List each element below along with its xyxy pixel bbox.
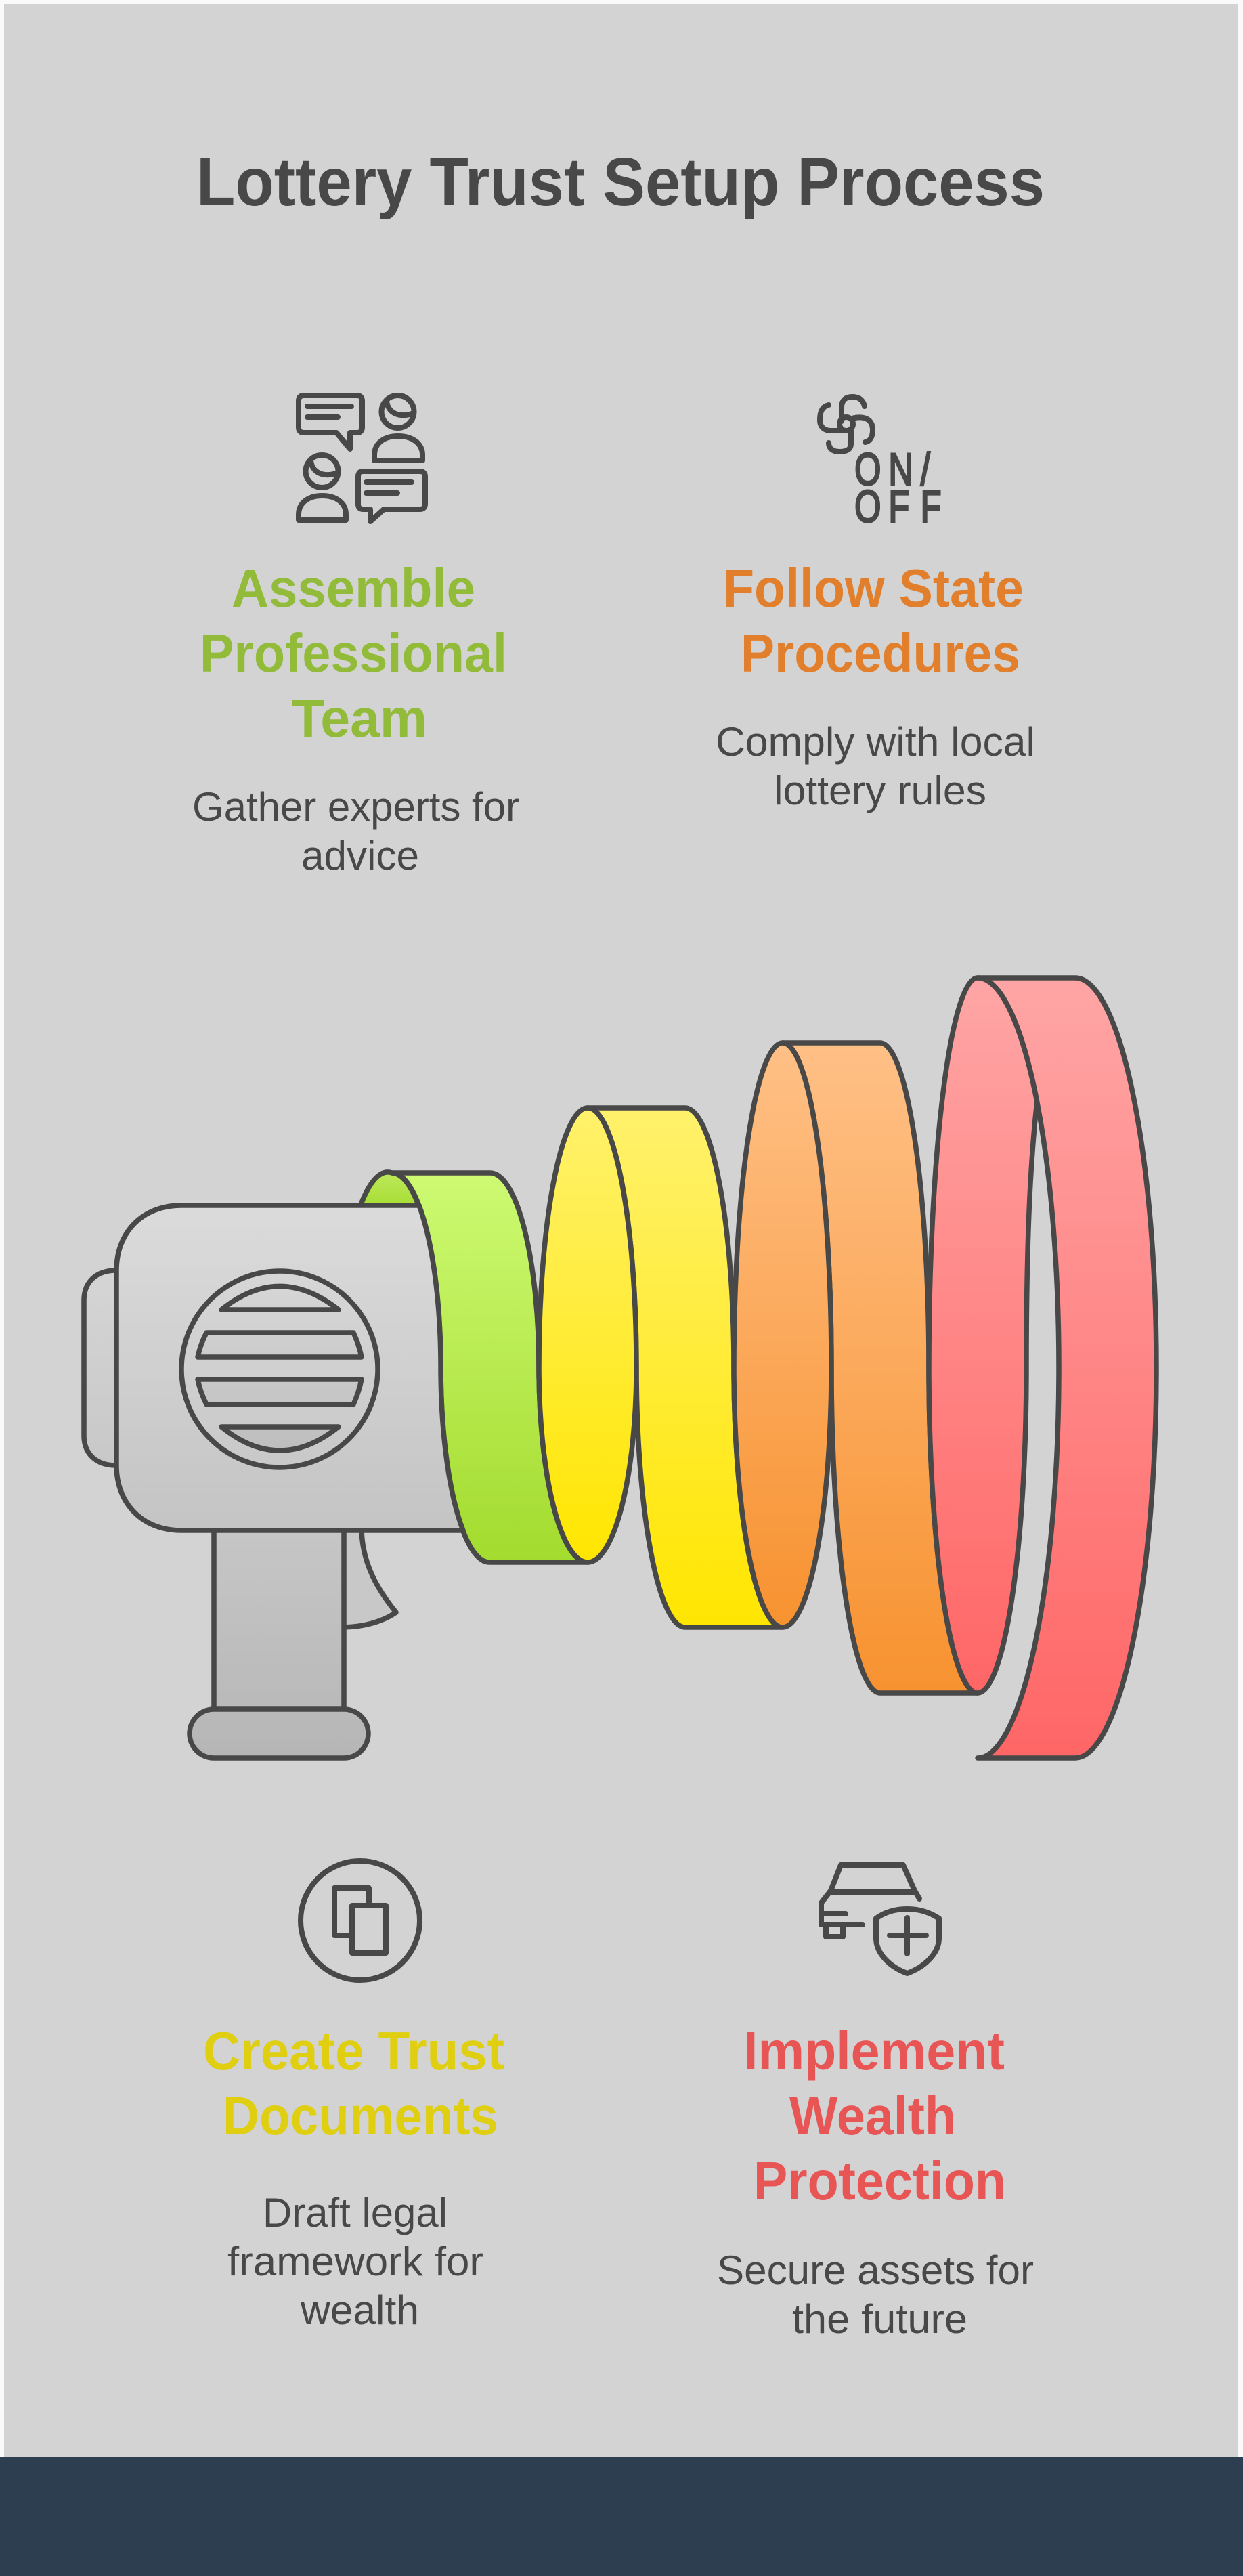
description bbox=[192, 784, 519, 878]
description: framework for bbox=[227, 2239, 483, 2284]
description: Gather experts for bbox=[192, 784, 519, 830]
description: the future bbox=[792, 2296, 967, 2342]
megaphone handle bbox=[214, 1527, 344, 1711]
panel: implement wealth protection bbox=[717, 1865, 1034, 2342]
description: wealth bbox=[300, 2288, 419, 2333]
megaphone speaker grill bbox=[181, 1271, 378, 1467]
megaphone chart bbox=[84, 978, 1156, 1758]
heading: Wealth bbox=[789, 2086, 956, 2146]
heading bbox=[743, 2021, 1006, 2211]
icon: car and shield bbox=[821, 1865, 939, 1973]
description: advice bbox=[301, 833, 419, 878]
stage 1 band: green bbox=[356, 1172, 588, 1562]
description: lottery rules bbox=[774, 768, 986, 813]
description: Secure assets for bbox=[717, 2248, 1034, 2293]
heading: Create Trust bbox=[203, 2021, 504, 2081]
heading: Protection bbox=[754, 2151, 1006, 2211]
icon: fan with on/off switch: OFF bbox=[854, 481, 941, 532]
icon: team conversation bbox=[299, 395, 425, 521]
icon: fan with on/off switch: ON/ bbox=[854, 444, 930, 495]
description bbox=[227, 2190, 483, 2333]
description: Draft legal bbox=[263, 2190, 448, 2235]
heading: Follow State bbox=[723, 558, 1024, 618]
megaphone body bbox=[116, 1205, 463, 1530]
heading bbox=[203, 2021, 504, 2146]
stage 2 band: yellow bbox=[539, 1108, 783, 1627]
heading: Professional bbox=[200, 623, 507, 683]
panel: assemble professional team bbox=[192, 395, 519, 878]
stage 3 band: orange bbox=[734, 1043, 978, 1693]
heading bbox=[723, 558, 1024, 683]
megaphone back plate bbox=[84, 1270, 116, 1465]
icon: fan with on/off switch bbox=[820, 397, 941, 532]
megaphone trigger bbox=[342, 1527, 396, 1627]
description: Comply with local bbox=[716, 719, 1035, 765]
heading: Procedures bbox=[741, 623, 1020, 683]
heading: Team bbox=[292, 688, 427, 748]
title: Lottery Trust Setup Process bbox=[196, 144, 1045, 220]
panel: follow state procedures bbox=[716, 397, 1035, 813]
panel: create trust documents bbox=[203, 1861, 504, 2333]
heading bbox=[200, 558, 507, 748]
heading: Documents bbox=[223, 2086, 498, 2146]
megaphone foot bbox=[190, 1709, 368, 1758]
description bbox=[716, 719, 1035, 813]
icon: documents in circle bbox=[301, 1861, 420, 1980]
heading: Implement bbox=[743, 2021, 1005, 2081]
stage 4 band: red bbox=[929, 978, 1156, 1758]
heading: Assemble bbox=[232, 558, 475, 618]
description bbox=[717, 2248, 1034, 2342]
